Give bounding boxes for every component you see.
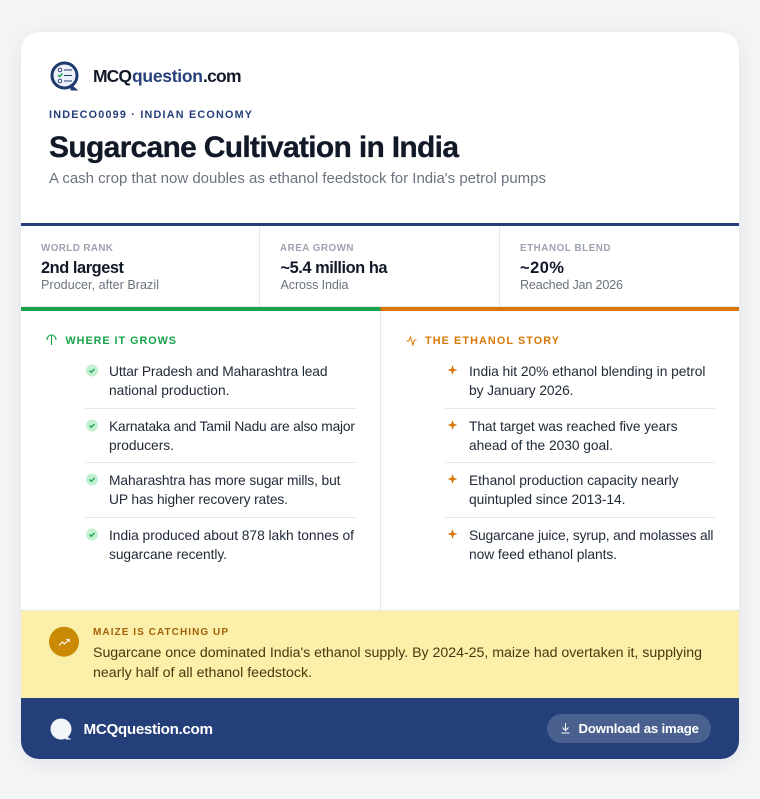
list: the ethanol story: now feed ethanol plants. <box>469 547 617 562</box>
list: the ethanol story: by January 2026. <box>469 383 574 398</box>
panel: where it grows <box>21 307 380 562</box>
callout: maize is catching up: Sugarcane once dominated India's ethanol supply. By 2024-25, maize had overtaken it, supplying <box>93 645 702 661</box>
callout: maize is catching up <box>21 610 739 698</box>
title: Sugarcane Cultivation in India <box>49 131 459 164</box>
panel: the ethanol story <box>380 307 739 562</box>
list: the ethanol story: Ethanol production capacity nearly <box>469 473 679 488</box>
header <box>49 63 546 187</box>
list: where it grows: Karnataka and Tamil Nadu are also major <box>109 419 355 434</box>
footer brand: MCQquestion.com <box>84 721 213 738</box>
stat: world rank <box>41 243 159 292</box>
stat: ethanol blend: ~20% <box>520 259 564 277</box>
stat: area grown: ~5.4 million ha <box>280 259 388 277</box>
brand name: MCQ <box>93 66 132 86</box>
brand name: question <box>132 66 203 86</box>
callout: maize is catching up: MAIZE IS CATCHING UP <box>93 627 228 638</box>
list: where it grows <box>85 364 356 562</box>
stats strip <box>21 223 739 307</box>
icon: MCQ logo <box>52 63 77 90</box>
heading: where it grows: WHERE IT GROWS <box>66 335 176 347</box>
stat: world rank: Producer, after Brazil <box>41 278 159 292</box>
stat: ethanol blend: ETHANOL BLEND <box>520 243 610 254</box>
list: the ethanol story: ahead of the 2030 goal. <box>469 438 613 453</box>
icon: footer logo <box>50 718 72 740</box>
list: where it grows: Maharashtra has more sugar mills, but <box>109 473 341 488</box>
footer <box>21 698 739 759</box>
button: download as image: Download as image <box>578 721 699 736</box>
stat: area grown <box>280 243 388 292</box>
list: the ethanol story: quintupled since 2013-14. <box>469 492 626 507</box>
stat: area grown: Across India <box>280 278 348 292</box>
heading: the ethanol story: THE ETHANOL STORY <box>425 335 560 347</box>
list: where it grows: national production. <box>109 383 230 398</box>
stat: world rank: WORLD RANK <box>41 243 113 254</box>
list: where it grows: Uttar Pradesh and Maharashtra lead <box>109 364 328 379</box>
list: where it grows: sugarcane recently. <box>109 547 227 562</box>
icon: trending up <box>49 627 79 657</box>
list: where it grows: India produced about 878 lakh tonnes of <box>109 528 354 543</box>
list: the ethanol story: Sugarcane juice, syrup, and molasses all <box>469 528 714 543</box>
icon: sprout <box>47 335 56 345</box>
button: download as image <box>547 714 711 743</box>
stat: world rank: 2nd largest <box>41 259 125 277</box>
icon: pulse <box>406 337 416 345</box>
list: where it grows: producers. <box>109 438 174 453</box>
brand name <box>93 66 242 86</box>
list: the ethanol story <box>445 364 715 562</box>
eyebrow tag: INDECO0099 · INDIAN ECONOMY <box>49 109 253 121</box>
list: where it grows: UP has higher recovery rates. <box>109 492 288 507</box>
stat: ethanol blend <box>520 243 623 292</box>
brand name: .com <box>203 66 242 86</box>
subtitle: A cash crop that now doubles as ethanol feedstock for India's petrol pumps <box>49 170 546 187</box>
stat: area grown: AREA GROWN <box>280 243 354 254</box>
stat: ethanol blend: Reached Jan 2026 <box>520 278 623 292</box>
list: the ethanol story: That target was reached five years <box>469 419 678 434</box>
list: the ethanol story: India hit 20% ethanol blending in petrol <box>469 364 706 379</box>
callout: maize is catching up: nearly half of all ethanol feedstock. <box>93 665 312 681</box>
